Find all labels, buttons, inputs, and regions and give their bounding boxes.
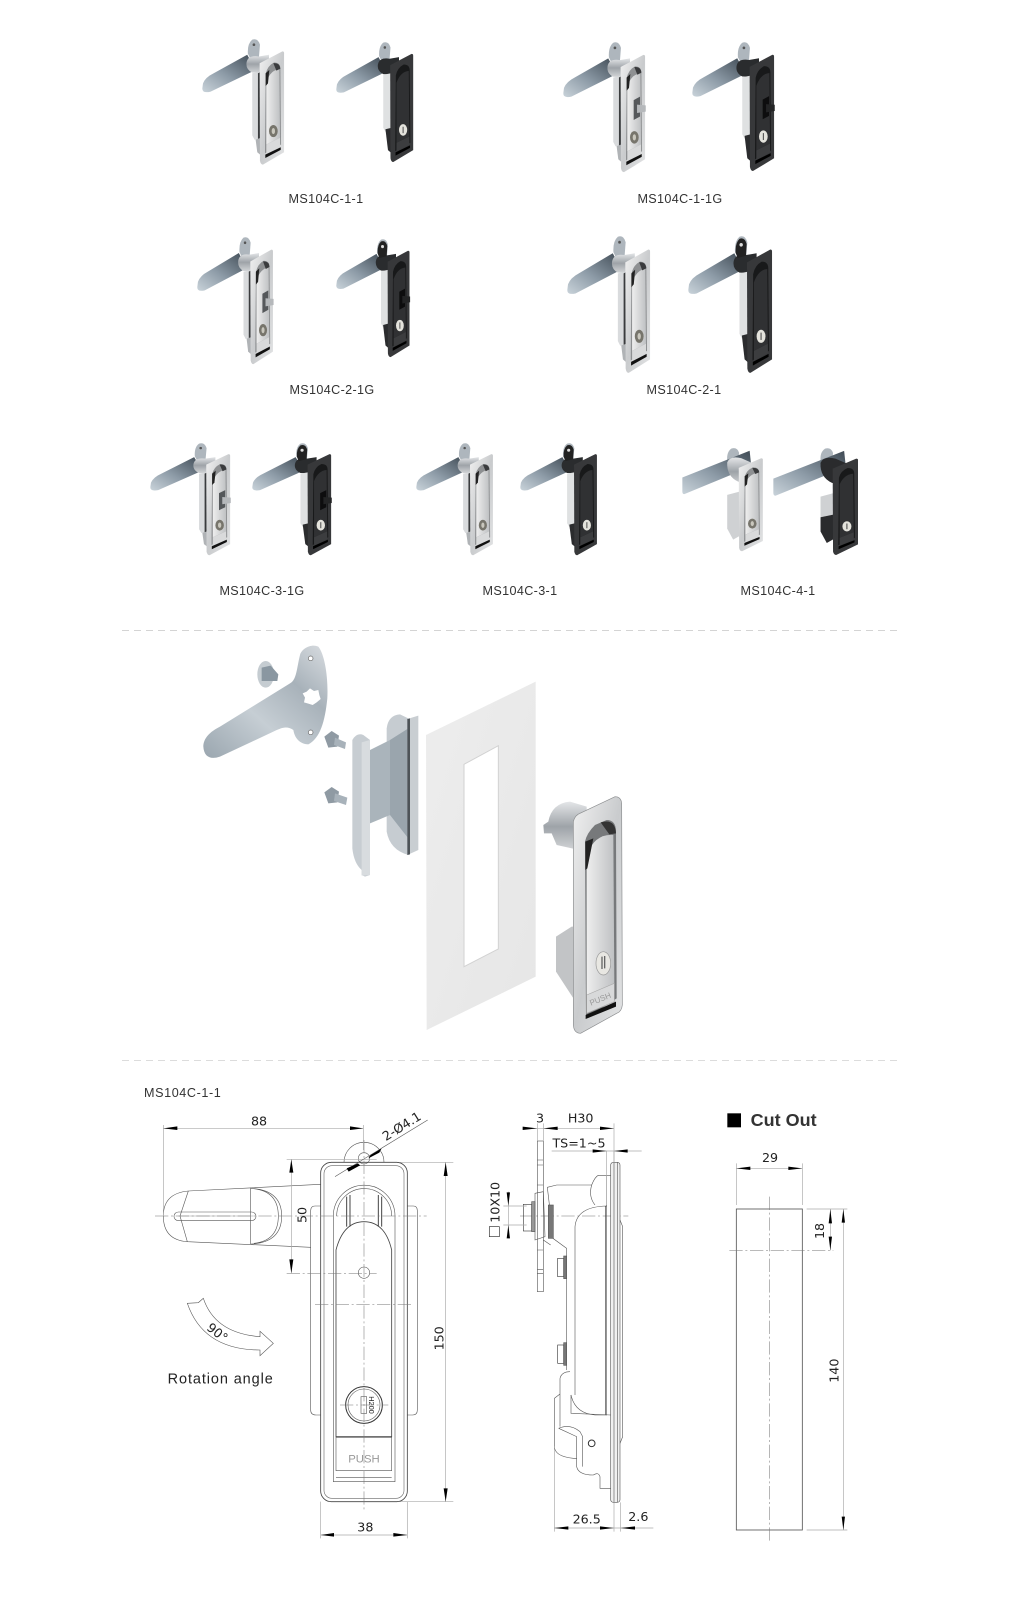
dimension 88: 88 (251, 1114, 267, 1129)
dimension 26.5 and 2.6: 2.6 (628, 1509, 648, 1524)
assembled lock: PUSH (588, 991, 613, 1008)
latch hook (554, 1372, 611, 1488)
dimension square 10X10: 10X10 (487, 1182, 502, 1223)
label: MS104C-1-1: MS104C-1-1 (289, 192, 363, 206)
dimension 140 (807, 1209, 847, 1530)
lock body (535, 1175, 611, 1415)
lock: silver MS104C-1-1G (563, 42, 646, 172)
label: MS104C-2-1G: MS104C-2-1G (289, 383, 375, 397)
dimension 26.5 and 2.6: 26.5 (573, 1511, 601, 1526)
label: MS104C-4-1: MS104C-4-1 (741, 584, 815, 598)
lock: black MS104C-4-1 (773, 448, 858, 555)
rotation angle label: Rotation angle (168, 1371, 274, 1387)
cut out section (727, 1110, 847, 1541)
lock: black MS104C-2-1G (336, 239, 410, 357)
mounting bracket behind plate (311, 1206, 417, 1415)
upper mounting bolt (558, 1256, 567, 1279)
nut (523, 1202, 553, 1238)
side view technical drawing (487, 1111, 653, 1532)
dimension TS=1~5 (551, 1135, 642, 1205)
lock: silver MS104C-2-1G (197, 237, 274, 364)
lock body outline (321, 1162, 407, 1502)
centre lines (155, 1140, 427, 1510)
rotation arrow 90 degrees (187, 1298, 273, 1356)
drawing label: MS104C-1-1 (144, 1086, 221, 1100)
lock: silver MS104C-4-1 (682, 448, 763, 551)
cut out heading: Cut Out (751, 1110, 817, 1130)
key cylinder (346, 1387, 382, 1423)
lever outline (163, 1184, 321, 1247)
product group: MS104C-2-1 (567, 236, 772, 397)
product group: MS104C-1-1G (563, 42, 775, 206)
dimension 3 and H30 (523, 1111, 614, 1162)
lock: black MS104C-3-1G (252, 443, 332, 555)
label: MS104C-3-1G: MS104C-3-1G (219, 584, 305, 598)
cam lever (203, 646, 328, 758)
dimension 150: 150 (432, 1326, 447, 1350)
dimension 29 (736, 1150, 802, 1205)
ear with hole (344, 1142, 384, 1164)
dimension TS=1~5: TS=1~5 (551, 1135, 606, 1150)
door panel with cutout (426, 682, 536, 1030)
flange plate (611, 1162, 623, 1502)
upper bolt (324, 731, 346, 749)
dimension 18 (807, 1209, 847, 1250)
lock: black MS104C-2-1 (688, 236, 772, 373)
dimension 50 (287, 1159, 377, 1273)
front view technical drawing (155, 1109, 453, 1538)
lock: black MS104C-1-1 (336, 42, 413, 162)
rotation arrow 90 degrees: 90° (204, 1320, 231, 1345)
hole callout 2-Ø4.1: 2-Ø4.1 (380, 1109, 424, 1144)
dimension 3 and H30: H30 (568, 1111, 593, 1126)
dimension 29: 29 (762, 1150, 778, 1165)
product group: MS104C-2-1G (197, 237, 410, 397)
PUSH marking: PUSH (348, 1453, 380, 1465)
lock: silver MS104C-3-1G (150, 443, 231, 555)
product group: MS104C-3-1G (150, 443, 332, 598)
lock: silver MS104C-1-1 (202, 39, 284, 165)
product group: MS104C-1-1 (202, 39, 413, 206)
label: MS104C-3-1: MS104C-3-1 (483, 584, 557, 598)
dimension 88 (163, 1114, 363, 1216)
lower mounting bolt (558, 1343, 567, 1365)
lock: black MS104C-1-1G (692, 42, 775, 171)
label: MS104C-2-1: MS104C-2-1 (647, 383, 721, 397)
product group: MS104C-3-1 (416, 443, 597, 598)
cut out rectangle (736, 1209, 802, 1530)
exploded view of the lock assembly (203, 646, 622, 1033)
dimension 26.5 and 2.6 (554, 1447, 653, 1532)
centre line (520, 1215, 628, 1217)
key cylinder: H200 (367, 1396, 376, 1414)
dimension 140: 140 (826, 1359, 841, 1383)
dimension square 10X10 (487, 1182, 527, 1238)
cam plate (537, 1141, 543, 1292)
dimension 150 (400, 1162, 453, 1502)
hole callout 2-Ø4.1 (335, 1109, 428, 1177)
rear screw (257, 661, 278, 688)
dimension 38: 38 (357, 1520, 373, 1535)
dimension 50: 50 (295, 1207, 310, 1223)
assembled lock (543, 797, 622, 1033)
lock: silver MS104C-3-1 (416, 443, 493, 555)
label: MS104C-1-1G: MS104C-1-1G (637, 192, 723, 206)
lock: black MS104C-3-1 (520, 443, 597, 555)
spring bracket (352, 714, 418, 877)
dimension 38 (321, 1502, 407, 1538)
dimension 18: 18 (812, 1223, 827, 1239)
product group: MS104C-4-1 (682, 448, 858, 598)
dimension 3 and H30: 3 (536, 1111, 544, 1126)
lower bolt (324, 787, 347, 805)
lock: silver MS104C-2-1 (567, 236, 650, 373)
centre lines (729, 1197, 833, 1541)
